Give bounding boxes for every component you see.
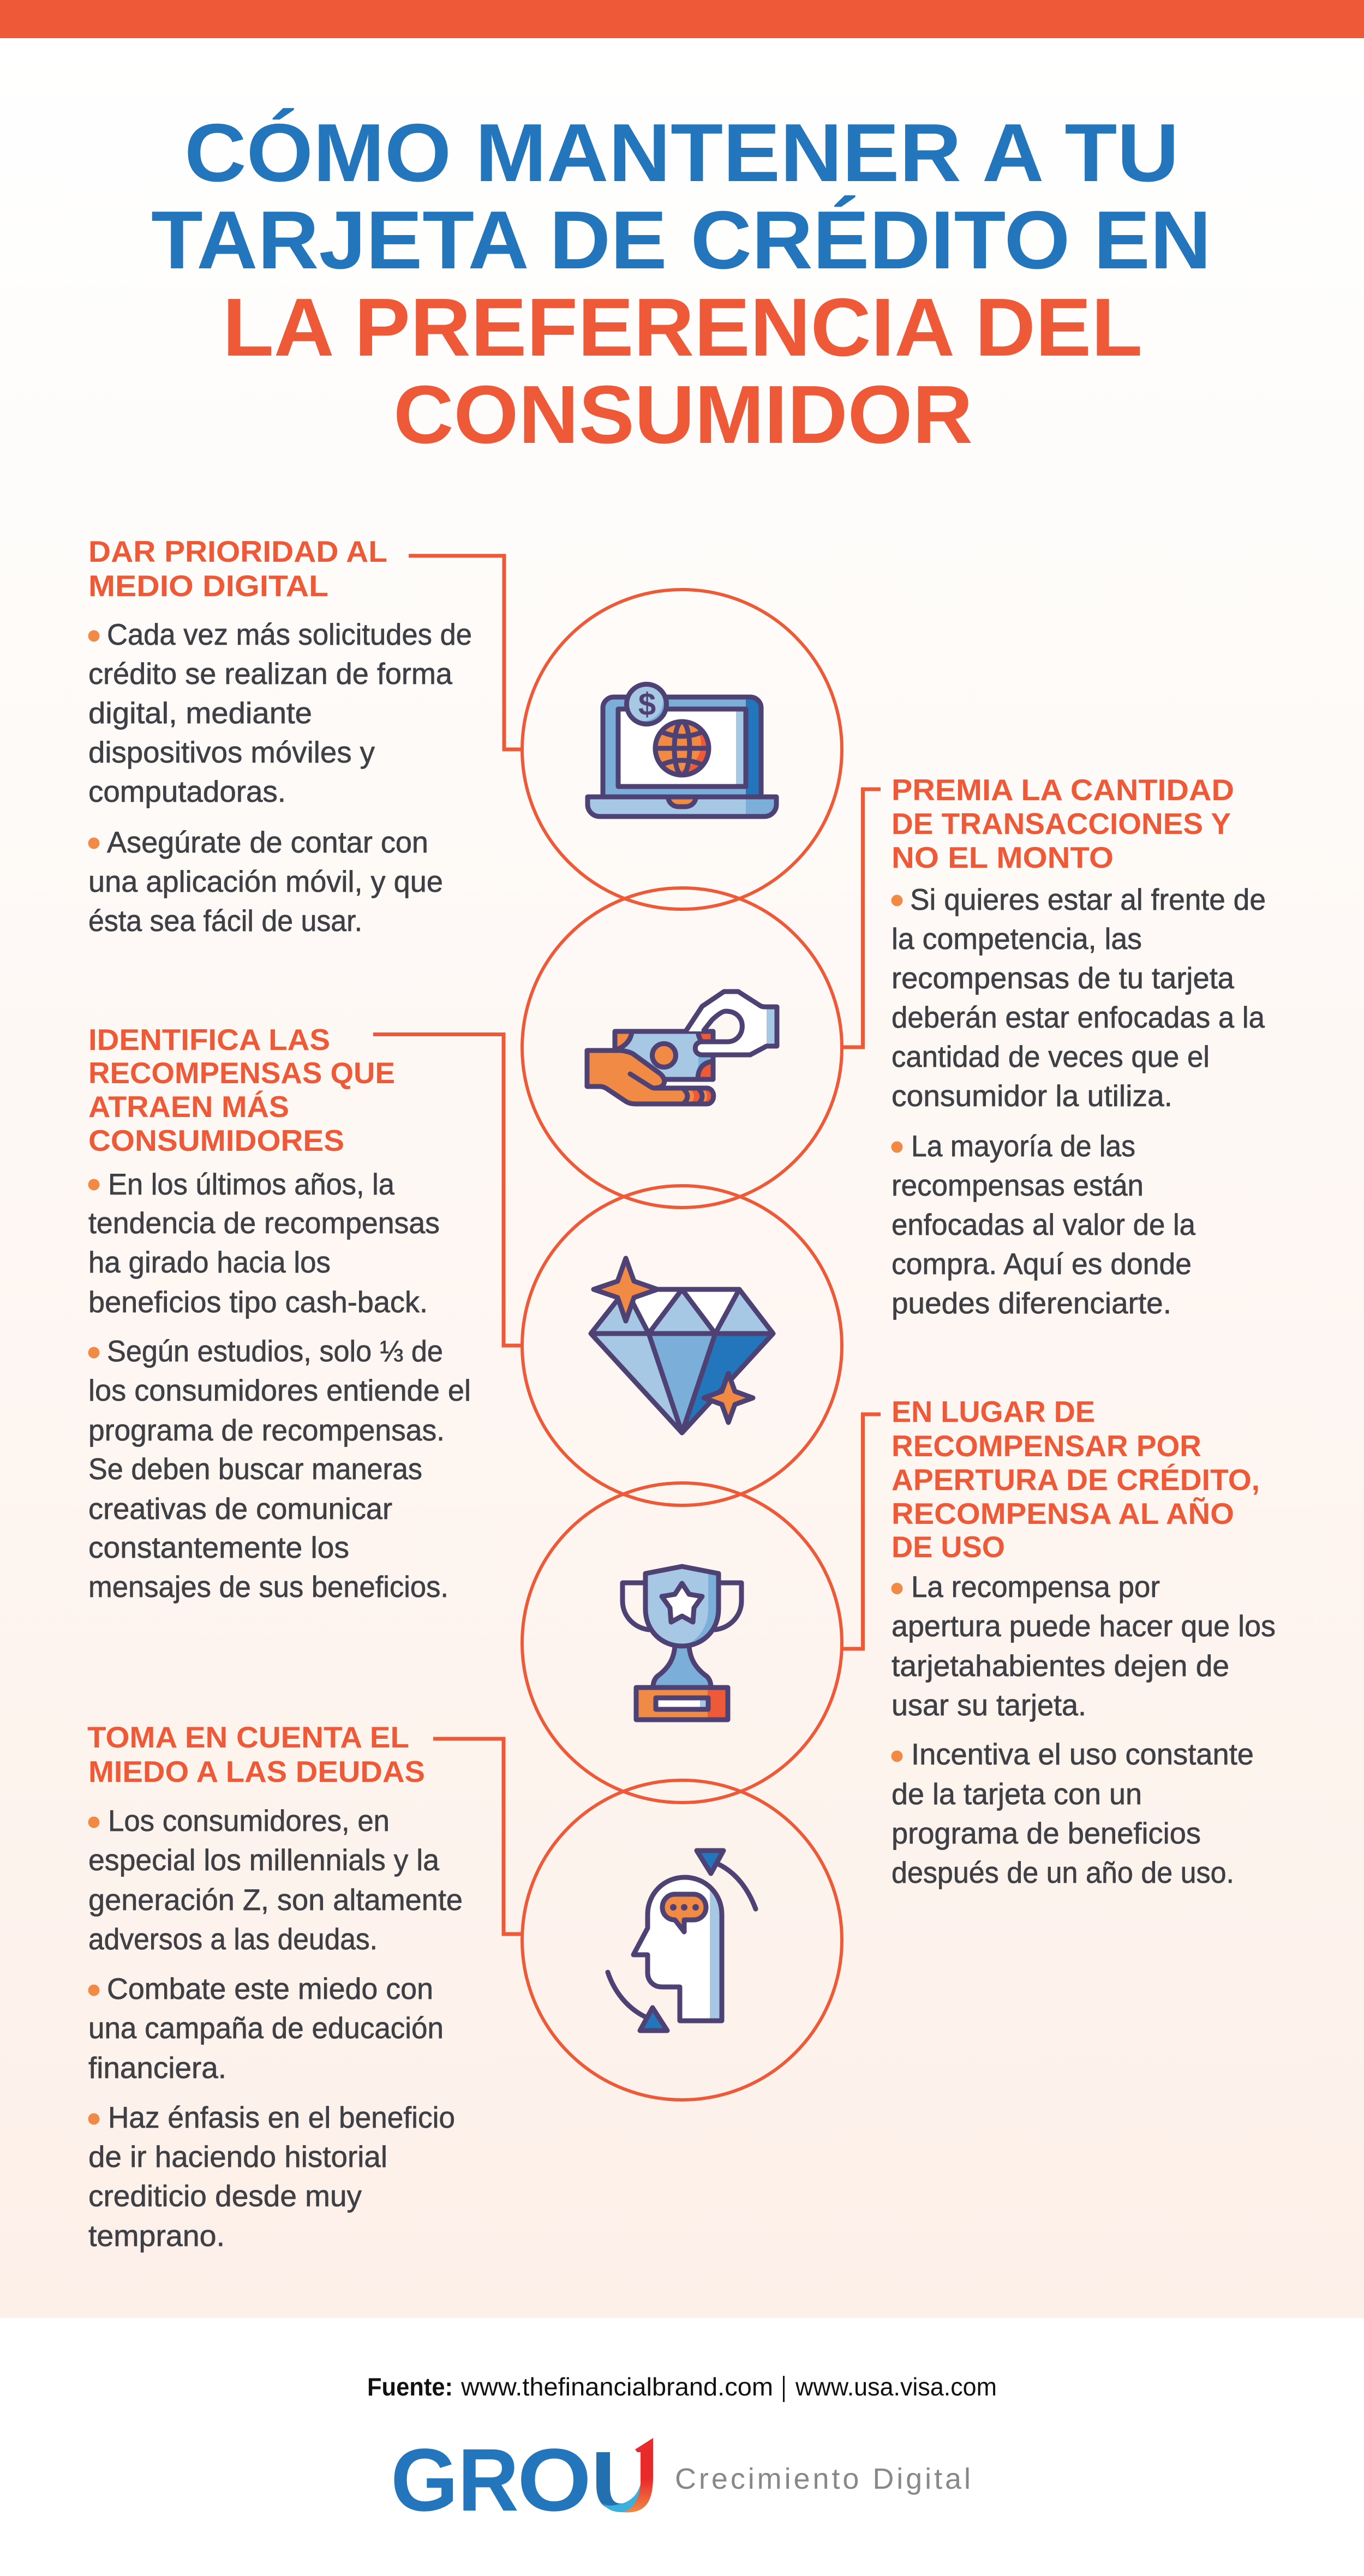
title	[151, 106, 1211, 460]
heading: RECOMPENSAR POR	[892, 1429, 1201, 1463]
body text: ésta sea fácil de usar.	[88, 904, 362, 938]
body text: Asegúrate de contar con	[107, 825, 428, 859]
body text: deberán estar enfocadas a la	[892, 1000, 1265, 1034]
body text: Incentiva el uso constante	[911, 1737, 1254, 1771]
body text: una aplicación móvil, y que	[88, 864, 443, 898]
body text: mensajes de sus beneficios.	[88, 1570, 448, 1604]
title: LA PREFERENCIA DEL	[223, 281, 1142, 373]
logo: GROU Crecimiento Digital: O	[517, 2430, 591, 2530]
body text: creativas de comunicar	[88, 1492, 392, 1526]
logo: GROU Crecimiento Digital	[391, 2430, 971, 2530]
body text: Según estudios, solo ⅓ de	[107, 1334, 443, 1368]
heading: DE USO	[892, 1530, 1005, 1564]
source line: www.usa.visa.com	[795, 2373, 997, 2401]
body text: computadoras.	[88, 774, 286, 808]
body text: la competencia, las	[892, 922, 1142, 956]
top bar	[0, 0, 1364, 38]
body text: enfocadas al valor de la	[892, 1208, 1195, 1241]
icon: head with speech bubble and arrows	[608, 1851, 756, 2031]
body text: de la tarjeta con un	[892, 1777, 1142, 1811]
source line: www.thefinancialbrand.com	[460, 2373, 773, 2401]
body text: ha girado hacia los	[88, 1245, 331, 1279]
central circles	[522, 590, 842, 2100]
body text: La mayoría de las	[911, 1129, 1135, 1163]
body text: después de un año de uso.	[892, 1856, 1234, 1889]
body text: una campaña de educación	[88, 2011, 444, 2045]
icon: hands exchanging money	[587, 992, 777, 1104]
body text: financiera.	[88, 2051, 226, 2085]
logo: GROU Crecimiento Digital: Crecimiento Digital	[675, 2463, 971, 2495]
body text: Los consumidores, en	[108, 1804, 390, 1838]
body text: programa de beneficios	[892, 1816, 1201, 1850]
heading: APERTURA DE CRÉDITO,	[892, 1463, 1260, 1497]
heading	[892, 1395, 1260, 1564]
panel: toma en cuenta el miedo a las deudas	[87, 1720, 463, 2253]
body text: especial los millennials y la	[88, 1843, 439, 1877]
heading: DE TRANSACCIONES Y	[892, 807, 1231, 840]
body text: Si quieres estar al frente de	[910, 882, 1266, 916]
heading: EN LUGAR DE	[892, 1395, 1095, 1428]
icon: laptop with globe and dollar coin	[588, 682, 776, 816]
heading: CONSUMIDORES	[88, 1124, 344, 1157]
body text: puedes diferenciarte.	[892, 1286, 1171, 1320]
body text	[892, 882, 1266, 1320]
body text: apertura puede hacer que los	[892, 1609, 1276, 1643]
body text	[892, 1570, 1276, 1889]
body text: compra. Aquí es donde	[892, 1247, 1192, 1281]
icon: trophy	[623, 1566, 741, 1720]
body text: Cada vez más solicitudes de	[107, 617, 472, 651]
heading: TOMA EN CUENTA EL	[87, 1720, 409, 1754]
body text: programa de recompensas.	[88, 1413, 445, 1447]
body text: Combate este miedo con	[107, 1972, 433, 2005]
icon: diamond with sparkles	[591, 1258, 773, 1433]
heading: RECOMPENSA AL AÑO	[892, 1497, 1234, 1530]
icon: laptop with globe and dollar coin: $	[638, 687, 656, 722]
body text: los consumidores entiende el	[88, 1373, 471, 1407]
body text	[88, 1167, 471, 1604]
heading	[88, 1023, 395, 1157]
body text: tendencia de recompensas	[88, 1206, 440, 1240]
body text	[88, 1804, 463, 2253]
heading	[892, 773, 1234, 874]
body text: usar su tarjeta.	[892, 1688, 1086, 1722]
heading: MIEDO A LAS DEUDAS	[88, 1755, 425, 1788]
title: CÓMO MANTENER A TU	[184, 106, 1179, 199]
title: TARJETA DE CRÉDITO EN	[151, 194, 1211, 286]
body text: recompensas están	[892, 1168, 1144, 1202]
body text: crediticio desde muy	[88, 2179, 362, 2213]
logo: GROU Crecimiento Digital: R	[458, 2430, 519, 2530]
panel: en lugar de recompensar por apertura	[892, 1395, 1276, 1889]
body text	[88, 617, 472, 938]
panel: dar prioridad al medio digital	[88, 535, 472, 938]
heading	[88, 535, 387, 603]
body text: dispositivos móviles y	[88, 735, 375, 769]
heading	[87, 1720, 425, 1788]
body text: temprano.	[88, 2219, 225, 2253]
body text: de ir haciendo historial	[88, 2140, 387, 2173]
heading: DAR PRIORIDAD AL	[88, 535, 387, 568]
body text: crédito se realizan de forma	[88, 657, 452, 690]
heading: PREMIA LA CANTIDAD	[892, 773, 1234, 807]
panel: premia la cantidad de transacciones	[892, 773, 1266, 1320]
heading: RECOMPENSAS QUE	[88, 1056, 395, 1090]
connector lines	[373, 556, 881, 1934]
title: CONSUMIDOR	[393, 368, 973, 460]
body text: La recompensa por	[911, 1570, 1160, 1604]
body text: constantemente los	[88, 1530, 349, 1564]
logo: GROU Crecimiento Digital: G	[391, 2430, 458, 2530]
body text: Se deben buscar maneras	[88, 1452, 422, 1486]
body text: beneficios tipo cash-back.	[88, 1285, 428, 1319]
body text: generación Z, son altamente	[88, 1883, 463, 1917]
body text: Haz énfasis en el beneficio	[108, 2100, 455, 2134]
panel: identifica las recompensas	[88, 1023, 471, 1604]
body text: En los últimos años, la	[108, 1167, 394, 1201]
source line	[367, 2373, 997, 2402]
body text: recompensas de tu tarjeta	[892, 961, 1234, 995]
body text: adversos a las deudas.	[88, 1922, 378, 1956]
heading: NO EL MONTO	[892, 840, 1114, 874]
body text: cantidad de veces que el	[892, 1040, 1210, 1073]
body text: consumidor la utiliza.	[892, 1079, 1172, 1113]
source line: Fuente:	[367, 2373, 453, 2401]
heading: IDENTIFICA LAS	[88, 1023, 330, 1056]
body text: digital, mediante	[88, 696, 312, 730]
heading: ATRAEN MÁS	[88, 1090, 289, 1124]
body text: tarjetahabientes dejen de	[892, 1649, 1229, 1683]
heading: MEDIO DIGITAL	[88, 569, 328, 603]
